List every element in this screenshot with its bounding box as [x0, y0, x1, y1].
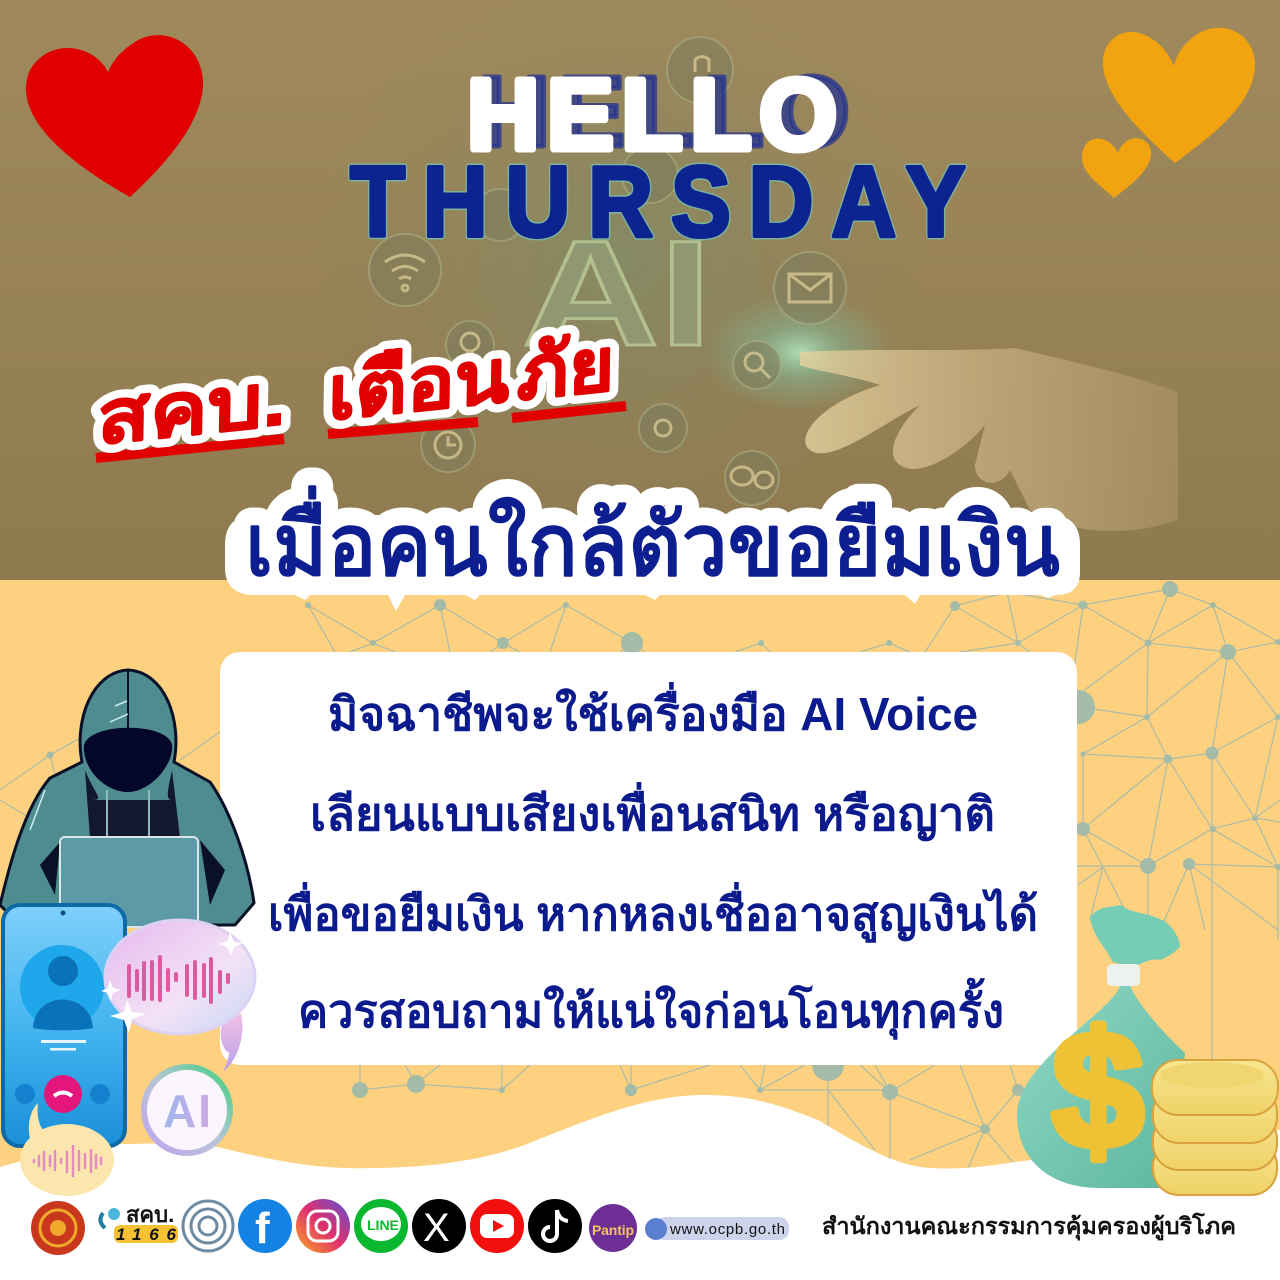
network pattern [0, 589, 1280, 1189]
photo icon glyphs [385, 57, 831, 488]
icon: OCPB emblem [31, 1201, 85, 1255]
icon: Facebook: f [255, 1204, 270, 1253]
icon: Instagram [296, 1199, 350, 1253]
title line: THURSDAY: THURSDAY [350, 147, 966, 258]
hotline logo: 1166 [116, 1225, 177, 1244]
icon: LINE [354, 1199, 408, 1253]
title line: HELLO: HELLO [478, 56, 850, 168]
icon: large orange heart [1103, 28, 1255, 163]
hand [800, 348, 1178, 531]
subtitle: เมื่อคนใกล้ตัวขอยืมเงิน [245, 486, 1060, 594]
warning text: สคบ. [97, 357, 287, 460]
warning text: สคบ. [97, 357, 287, 460]
warning text: เตือน [327, 333, 510, 436]
illustration: small voice bubble [20, 1103, 114, 1196]
body line 3: เพื่อขอยืมเงิน หากหลงเชื่ออาจสูญเงินได้ [268, 882, 1038, 943]
website badge [645, 1217, 789, 1240]
icon: X [412, 1199, 466, 1253]
illustration: hooded hacker [0, 670, 254, 927]
coin stack [1152, 1060, 1278, 1195]
white sticker blob [225, 515, 1080, 611]
icon: YouTube [470, 1199, 524, 1253]
hotline logo [100, 1202, 178, 1244]
title line: THURSDAY: THURSDAY [350, 147, 966, 258]
illustration: voice speech bubble [101, 920, 255, 1072]
photo icon nodes [369, 37, 846, 505]
illustration: smartphone on a call [3, 905, 125, 1146]
footer organisation name: สำนักงานคณะกรรมการคุ้มครองผู้บริโภค [822, 1212, 1236, 1241]
footer logos [31, 1199, 789, 1255]
icon: LINE: LINE [367, 1217, 399, 1233]
dollar sign: $ [1052, 998, 1144, 1182]
icon: CPB circle logo [183, 1201, 233, 1251]
body line 4: ควรสอบถามให้แน่ใจก่อนโอนทุกครั้ง [298, 977, 1004, 1040]
panel: top photo background [0, 0, 1280, 580]
red underline [96, 406, 626, 458]
warning text: เตือน [327, 333, 510, 436]
white wave footer [0, 1095, 1280, 1280]
icon: red heart [26, 35, 203, 197]
warning heading [96, 322, 626, 460]
callout body text [268, 682, 1038, 1040]
icon: TikTok [528, 1199, 582, 1253]
body line 1: มิจฉาชีพจะใช้เครื่องมือ AI Voice [328, 682, 978, 740]
illustration: money bag and coins [1017, 905, 1278, 1195]
panel: lower cream background [0, 580, 1280, 1280]
body line 2: เลียนแบบเสียงเพื่อนสนิท หรือญาติ [310, 782, 995, 841]
glow from the finger [705, 292, 895, 412]
icon: X: X [423, 1206, 450, 1250]
subtitle: เมื่อคนใกล้ตัวขอยืมเงิน [245, 486, 1060, 594]
icon: Facebook [238, 1199, 292, 1253]
icon: AI badge: AI [163, 1085, 211, 1137]
icon: Pantip: Pantip [592, 1222, 634, 1238]
website badge: www.ocpb.go.th [669, 1221, 785, 1238]
icon: small orange heart [1082, 138, 1151, 198]
white content card [220, 652, 1077, 1065]
title line: HELLO: HELLO [467, 59, 837, 171]
title [350, 56, 966, 258]
icon: AI badge [144, 1067, 230, 1153]
AI letters in the photo: AI [522, 209, 712, 377]
warning text: ภัย [516, 322, 615, 416]
icon: Pantip [589, 1204, 637, 1252]
warning text [97, 322, 615, 460]
hotline logo: สคบ. [126, 1202, 174, 1227]
warning text: ภัย [516, 322, 615, 416]
